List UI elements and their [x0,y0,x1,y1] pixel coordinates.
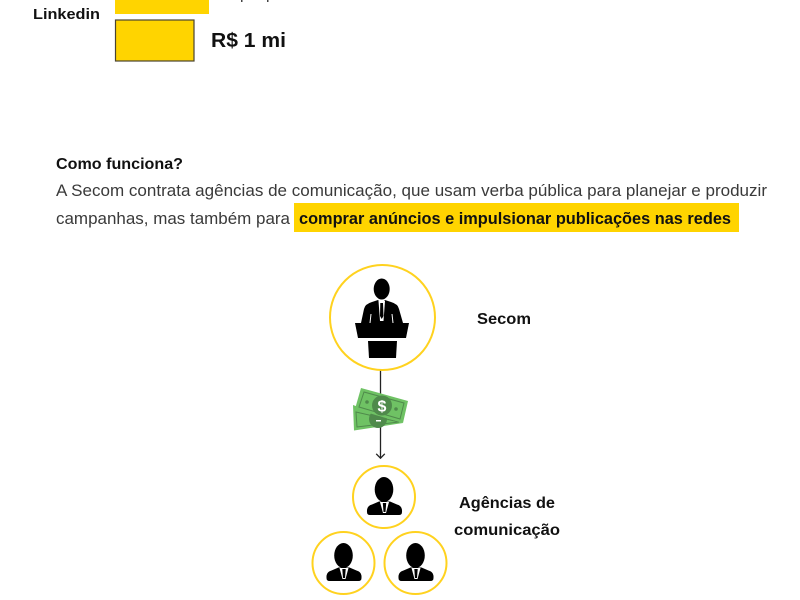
icon: agency right [384,532,446,594]
highlight callout: comprar anúncios e impulsionar publicações nas redes [299,210,731,228]
icon: Secom speaker at podium [330,265,435,370]
legend square: R$ 1 mi [116,20,194,61]
heading: Como funciona?: Como funciona? [56,156,183,173]
icon: money bills: $ [378,398,387,416]
legend: clipped value descenders [241,0,268,2]
text block: first line: A Secom contrata agências de comunicação, que usam verba pública para planejar e produzir [56,182,768,200]
label: Agências de comunicação: Agências de [459,495,555,512]
highlight callout [294,203,739,232]
text block: second line: campanhas, mas também para [56,210,291,228]
label: Agências de comunicação: comunicação [454,522,560,539]
icon: money bills [353,388,408,430]
icon: agency top [353,466,415,528]
value: R$ 1 mi: R$ 1 mi [211,29,286,52]
label: Secom: Secom [477,311,531,328]
label: Linkedin: Linkedin [33,6,100,23]
icon: agency left [312,532,374,594]
bar: clipped upper value [115,0,209,14]
label: Agências de comunicação [454,495,560,539]
arrow: Secom to agencies [376,370,385,458]
